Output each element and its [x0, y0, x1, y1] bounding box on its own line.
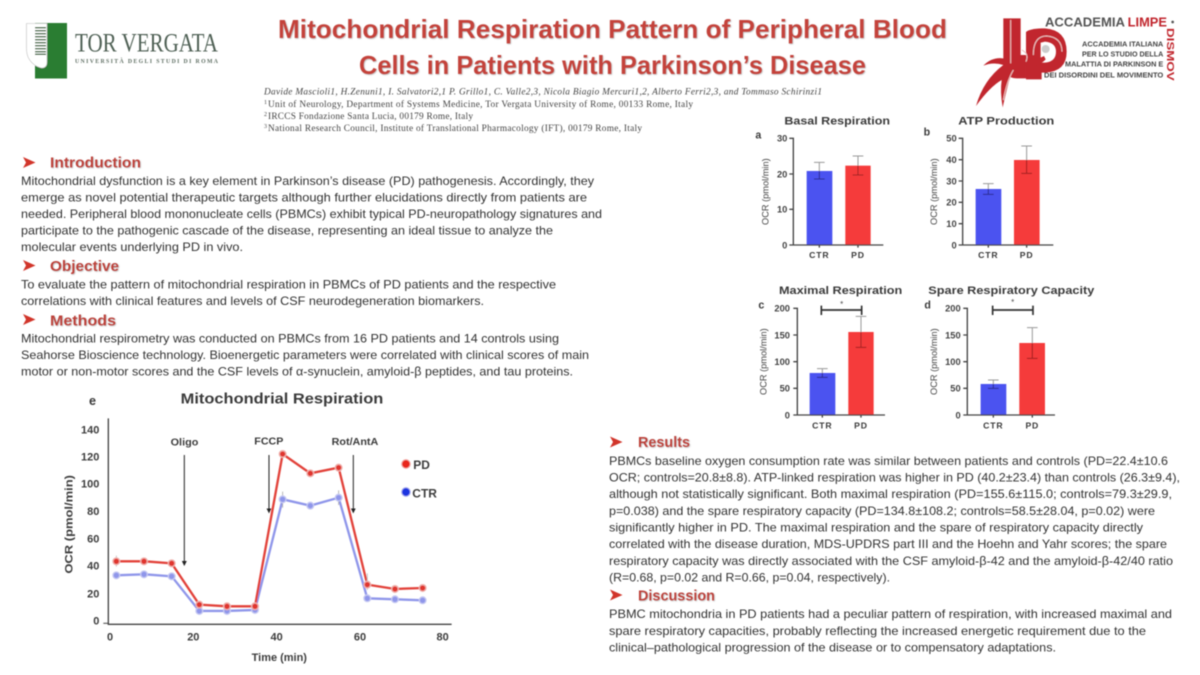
- heading: results: Results: [638, 435, 690, 451]
- logo: Accademia LIMPE DISMOV: DISMOV: [1164, 28, 1175, 81]
- logo: Accademia LIMPE DISMOV: [976, 16, 1175, 107]
- panel letter: e: [89, 394, 96, 408]
- heading: introduction: Introduction: [50, 156, 141, 172]
- text block: objective: To evaluate the pattern of mitochondrial respiration in PBMCs of PD patients and the respective: [21, 278, 556, 292]
- text block: results: respiratory capacity was directly associated with the CSF amyloid-β-42 and the amyloid-β-42/40 ratio: [609, 554, 1173, 568]
- icon: arrow bullet: [610, 436, 622, 448]
- panel: results: [609, 435, 1180, 584]
- chart: spare respiratory capacity: CTR: [983, 421, 1003, 431]
- chart: ATP production: 50: [946, 134, 957, 144]
- legend: [402, 458, 437, 500]
- PD series: [113, 451, 426, 610]
- chart: basal respiration: OCR (pmol/min): [761, 158, 771, 225]
- bar charts: maximal respiration and spare respiratory capacity: [758, 285, 1094, 431]
- text block: discussion: spare respiratory capacities, probably reflecting the increased energetic requirement due to the: [609, 624, 1146, 638]
- panel: objective: [21, 259, 556, 308]
- chart: ATP production: 10: [946, 219, 957, 229]
- axes: Time (min): [252, 652, 307, 664]
- chart: ATP production: [924, 115, 1054, 260]
- authors and affiliations: Davide Mascioli1, H.Zenuni1, I. Salvatori2,1 P. Grillo1, C. Valle2,3, Nicola Biagio Mercuri1,2, Alberto Ferri2,3, and Tommaso Schirinzi1: [263, 88, 822, 98]
- chart: ATP production: PD: [1020, 250, 1033, 260]
- axes: 100: [81, 479, 99, 491]
- text block: discussion: [609, 607, 1172, 654]
- arrow: Oligo: [171, 438, 198, 565]
- title: Cells in Patients with Parkinson’s Disease: [359, 50, 866, 80]
- text block: objective: [21, 278, 556, 308]
- chart: spare respiratory capacity: 150: [945, 330, 961, 340]
- text block: results: OCR; controls=20.8±8.8). ATP-linked respiration was higher in PD (40.2±23.4) than controls (26.3±9.4),: [609, 470, 1180, 484]
- legend: PD: [413, 458, 430, 472]
- heading: objective: Objective: [50, 259, 119, 275]
- chart: ATP production: 30: [946, 176, 957, 186]
- text block: methods: Mitochondrial respirometry was conducted on PBMCs from 16 PD patients and 14 controls using: [21, 332, 559, 346]
- text block: introduction: molecular events underlying PD in vivo.: [21, 240, 243, 254]
- chart: maximal respiration: 50: [780, 384, 790, 394]
- chart: maximal respiration: *: [840, 300, 843, 309]
- bar charts: basal respiration and ATP production: [755, 115, 1054, 260]
- chart: ATP production: OCR (pmol/min): [929, 158, 939, 225]
- axes: 20: [187, 632, 199, 644]
- chart: maximal respiration: OCR (pmol/min): [759, 328, 769, 395]
- logo: Tor Vergata university: UNIVERSITÀ DEGLI STUDI DI ROMA: [75, 57, 219, 65]
- chart: ATP production: 20: [946, 198, 957, 208]
- chart: basal respiration: 30: [777, 134, 787, 144]
- text block: introduction: [21, 174, 602, 254]
- text block: discussion: clinical–pathological progression of the disease or to compensatory adaptations.: [609, 640, 1056, 654]
- axes: 20: [87, 588, 99, 600]
- text block: results: PBMCs baseline oxygen consumption rate was similar between patients and controls (PD=22.4±10.6: [609, 454, 1168, 468]
- chart: spare respiratory capacity: d: [924, 299, 931, 311]
- axes: 140: [81, 424, 99, 436]
- arrow: FCCP: [254, 436, 283, 512]
- chart title: Mitochondrial Respiration: [181, 391, 383, 407]
- title: Mitochondrial Respiration Pattern of Peripheral Blood: [278, 14, 947, 44]
- text block: introduction: Mitochondrial dysfunction is a key element in Parkinson’s disease (PD) pathogenesis. Accordingly, they: [21, 174, 594, 188]
- legend: CTR: [412, 486, 437, 500]
- axes: 0: [107, 632, 113, 644]
- arrow: FCCP: FCCP: [254, 436, 283, 447]
- chart: spare respiratory capacity: 100: [945, 357, 961, 367]
- text block: results: correlated with the disease duration, MDS-UPDRS part III and the Hoehn and Yahr scores; the spare: [609, 537, 1167, 551]
- logo: Accademia LIMPE DISMOV: LIMPE: [1128, 16, 1167, 30]
- panel: methods: [21, 314, 589, 378]
- authors and affiliations: National Research Council, Institute of Translational Pharmacology (IFT), 00179 Rome, Italy: [268, 123, 642, 134]
- text block: introduction: emerge as novel potential therapeutic targets although further elucidations directly from patients are: [21, 190, 587, 204]
- icon: arrow bullet: [23, 157, 36, 168]
- axes: OCR (pmol/min): [63, 475, 75, 574]
- chart: ATP production: b: [924, 127, 931, 139]
- chart: basal respiration: a: [755, 129, 761, 141]
- chart: maximal respiration: c: [758, 299, 764, 311]
- chart: spare respiratory capacity: 200: [945, 304, 961, 314]
- chart: ATP production: CTR: [978, 250, 998, 260]
- text block: methods: [21, 332, 589, 378]
- axes: 60: [87, 533, 99, 545]
- text block: results: although not statistically significant. Both maximal respiration (PD=155.6±115.0; controls=79.3±29.9,: [609, 487, 1172, 501]
- chart: maximal respiration: Maximal Respiration: [779, 285, 902, 297]
- logo: Accademia LIMPE DISMOV: DEI DISORDINI DEL MOVIMENTO: [1044, 70, 1164, 79]
- text block: results: p=0.038) and the spare respiratory capacity (PD=134.8±108.2; controls=58.5±28.04, p=0.02) were: [609, 504, 1155, 518]
- logo: Accademia LIMPE DISMOV: ACCADEMIA: [1045, 16, 1125, 30]
- chart: spare respiratory capacity: *: [1011, 298, 1014, 307]
- logo: Tor Vergata university: TOR VERGATA: [75, 28, 218, 58]
- axes: 40: [87, 561, 99, 573]
- chart: basal respiration: 10: [777, 205, 787, 215]
- axes: 60: [354, 632, 366, 644]
- chart: ATP production: 40: [946, 155, 957, 165]
- chart: maximal respiration: 0: [785, 410, 790, 420]
- authors and affiliations: 1: [264, 100, 267, 106]
- authors and affiliations: Unit of Neurology, Department of Systems Medicine, Tor Vergata University of Rome, 00133 Rome, Italy: [268, 99, 693, 110]
- icon: arrow bullet: [610, 590, 622, 600]
- chart: spare respiratory capacity: Spare Respiratory Capacity: [928, 285, 1094, 297]
- chart: spare respiratory capacity: PD: [1025, 421, 1039, 431]
- arrow: Oligo: Oligo: [171, 438, 198, 449]
- text block: discussion: PBMC mitochondria in PD patients had a peculiar pattern of respiration, with increased maximal and: [609, 607, 1172, 621]
- authors and affiliations: [263, 88, 822, 134]
- text block: introduction: participate to the pathogenic cascade of the disease, representing an ideal tissue to analyze the: [21, 224, 553, 238]
- CTR series: [113, 490, 426, 614]
- chart: basal respiration: 0: [782, 240, 787, 250]
- axes: 0: [93, 616, 99, 628]
- chart: spare respiratory capacity: [924, 285, 1094, 431]
- chart: basal respiration: CTR: [809, 250, 829, 260]
- logo: Accademia LIMPE DISMOV: ACCADEMIA ITALIANA: [1082, 39, 1164, 48]
- axes: 80: [437, 632, 449, 644]
- text block: objective: correlations with clinical features and levels of CSF neurodegeneration biomarkers.: [21, 294, 484, 308]
- authors and affiliations: 2: [264, 112, 267, 118]
- text block: results: significantly higher in PD. The maximal respiration and the spare of respiratory capacity directly: [609, 520, 1143, 534]
- chart: maximal respiration: 100: [774, 357, 790, 367]
- chart: maximal respiration: 200: [774, 304, 790, 314]
- heading: methods: Methods: [50, 314, 116, 330]
- chart: spare respiratory capacity: 0: [955, 410, 961, 420]
- line chart: mitochondrial respiration: [63, 391, 452, 664]
- axes: 120: [81, 452, 99, 464]
- icon: arrow bullet: [23, 314, 36, 325]
- axes: 80: [87, 506, 99, 518]
- chart: basal respiration: PD: [851, 250, 865, 260]
- text block: introduction: needed. Peripheral blood mononucleate cells (PBMCs) exhibit typical PD-neuropathology signatures and: [21, 207, 602, 221]
- icon: arrow bullet: [23, 260, 36, 271]
- title: [278, 14, 947, 80]
- panel: discussion: [609, 588, 1172, 654]
- arrow: Rot/AntA: [332, 437, 379, 512]
- text block: results: (R=0.68, p=0.02 and R=0.66, p=0.04, respectively).: [609, 570, 890, 584]
- axes: 40: [271, 632, 283, 644]
- axes: [63, 418, 452, 664]
- text block: methods: motor or non-motor scores and the CSF levels of α-synuclein, amyloid-β peptides, and tau proteins.: [21, 364, 573, 378]
- panel: introduction: [21, 156, 602, 254]
- chart: basal respiration: Basal Respiration: [784, 115, 890, 127]
- text block: results: [609, 454, 1180, 584]
- logo: Accademia LIMPE DISMOV: MALATTIA DI PARKINSON E: [1065, 60, 1163, 69]
- logo: Tor Vergata university: [26, 23, 219, 78]
- chart: spare respiratory capacity: 50: [950, 384, 961, 394]
- chart: spare respiratory capacity: OCR (pmol/min): [929, 328, 939, 395]
- chart: maximal respiration: [758, 285, 902, 431]
- chart: maximal respiration: 150: [774, 330, 790, 340]
- authors and affiliations: 3: [264, 124, 267, 130]
- arrow: Rot/AntA: Rot/AntA: [332, 437, 379, 448]
- chart: basal respiration: [755, 115, 890, 260]
- logo: Accademia LIMPE DISMOV: PER LO STUDIO DELLA: [1082, 50, 1164, 59]
- chart: maximal respiration: PD: [854, 421, 868, 431]
- authors and affiliations: IRCCS Fondazione Santa Lucia, 00179 Rome, Italy: [268, 112, 473, 122]
- chart: basal respiration: 20: [777, 169, 787, 179]
- chart: ATP production: ATP Production: [958, 115, 1054, 127]
- chart: maximal respiration: CTR: [812, 421, 832, 431]
- heading: discussion: Discussion: [638, 588, 715, 604]
- chart: ATP production: 0: [951, 240, 957, 250]
- text block: methods: Seahorse Bioscience technology. Bioenergetic parameters were correlated with clinical scores of main: [21, 348, 589, 362]
